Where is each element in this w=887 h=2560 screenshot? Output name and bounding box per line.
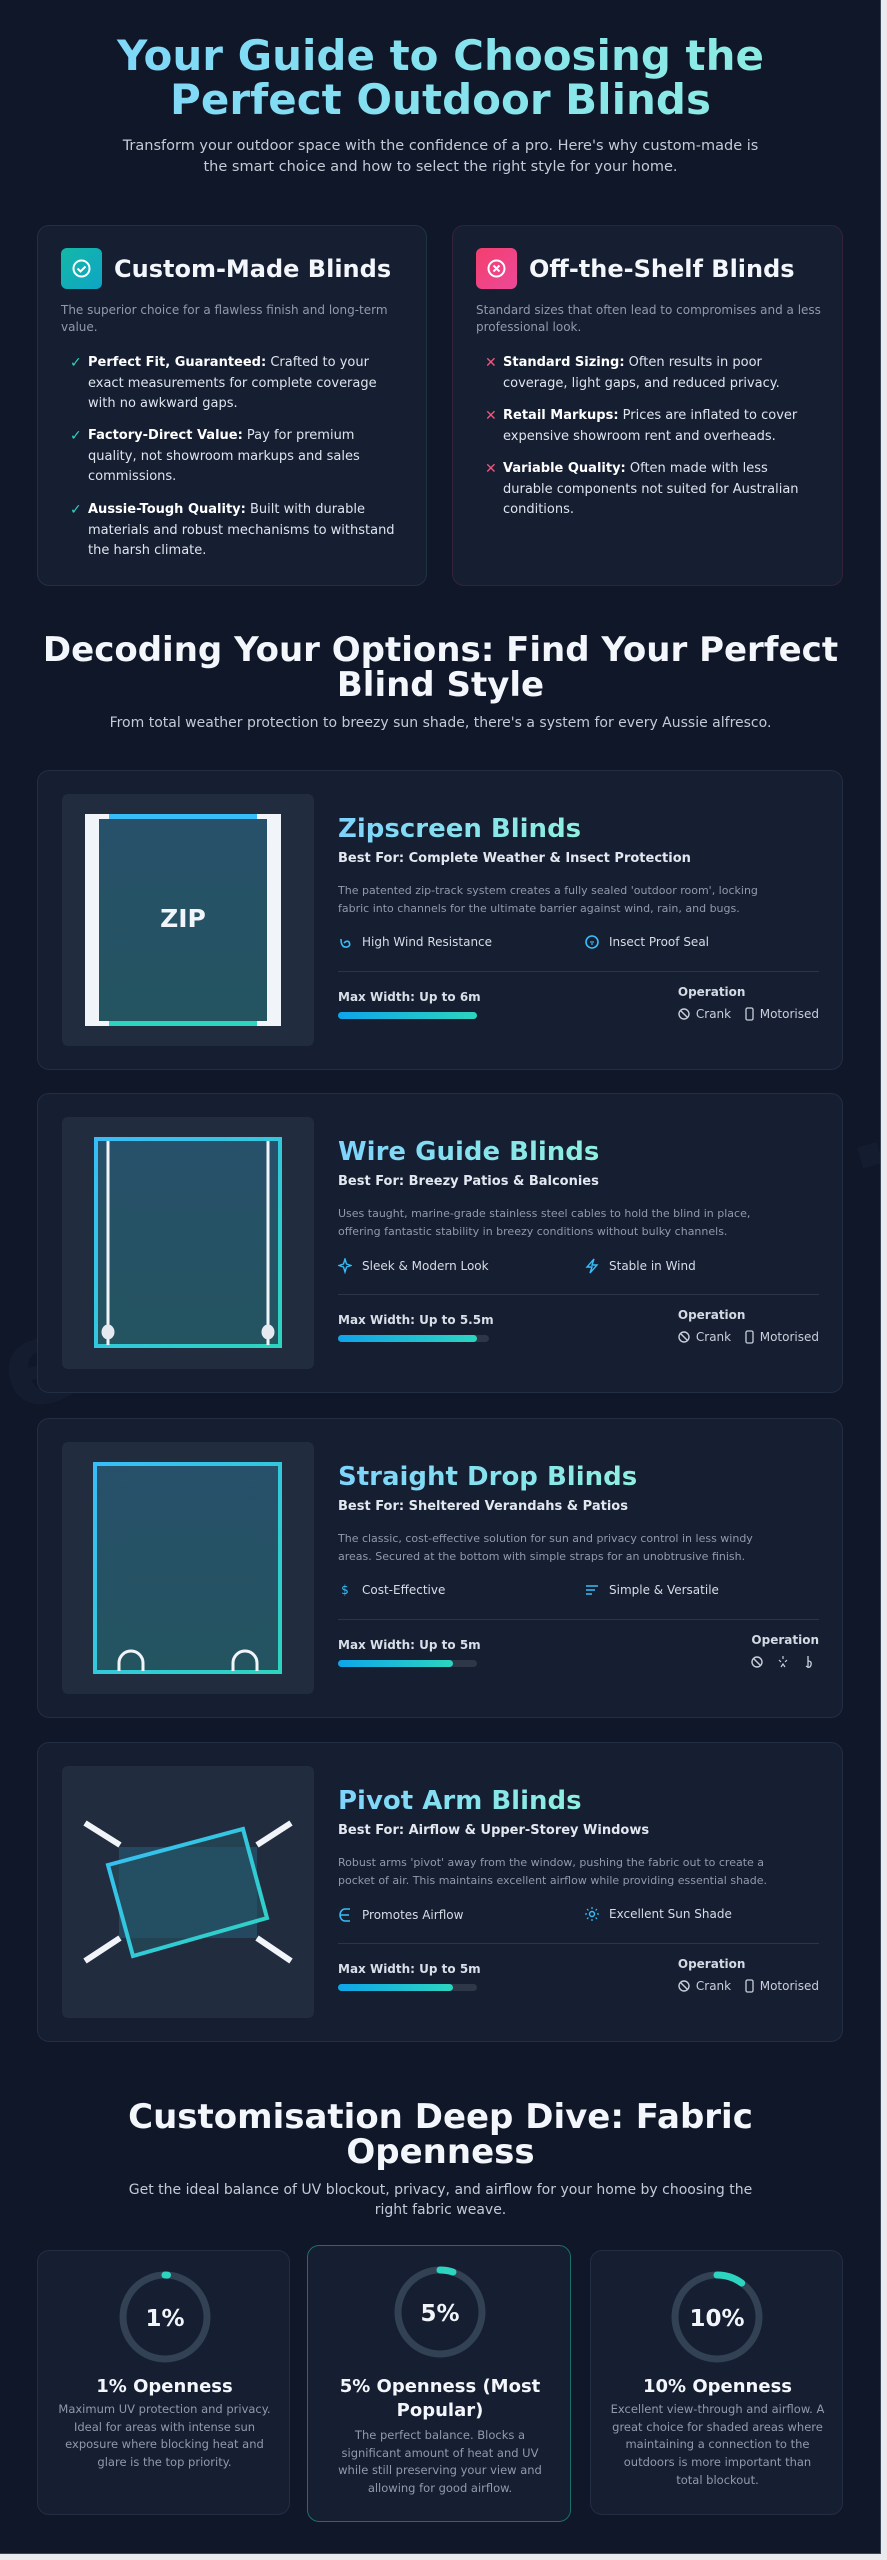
content: pivot arm: Crank Motorised <box>696 1979 819 1993</box>
content: pivot arm <box>338 1786 819 1993</box>
list: benefits: Factory-Direct Value: Pay for premium quality, not showroom markups and sales commissions. <box>88 428 360 484</box>
content: zipscreen: Crank Motorised <box>696 1007 819 1021</box>
list: benefits: ✓ <box>70 502 82 518</box>
content: pivot arm: Max Width: Up to 5m <box>338 1962 481 1976</box>
panel: 10% openness <box>590 2250 843 2515</box>
content: zipscreen: Insect Proof Seal <box>609 935 709 949</box>
content: wire guide: Stable in Wind <box>609 1259 696 1273</box>
text: 1%: Maximum UV protection and privacy. Ideal for areas with intense sun exposure where blocking heat and glare is the top priority. <box>58 2402 271 2469</box>
chart: 10% ring <box>672 2272 762 2362</box>
chart: 5% ring: 5% <box>420 2301 460 2327</box>
illustration: zip: ZIP <box>160 904 206 933</box>
content: straight drop: Best For: Sheltered Verandahs & Patios <box>338 1499 628 1514</box>
heading: Off-the-Shelf Blinds <box>529 255 795 283</box>
content: wire guide: Sleek & Modern Look <box>362 1259 489 1273</box>
description: The superior choice for a flawless finish and long-term value. <box>61 303 388 334</box>
content: zipscreen: Best For: Complete Weather & Insect Protection <box>338 851 691 866</box>
list: benefits: Perfect Fit, Guaranteed: Crafted to your exact measurements for complete coverage with no awkward gaps. <box>88 355 377 411</box>
heading: fabric openness: Customisation Deep Dive: Fabric Openness <box>128 2097 753 2172</box>
panel: off-the-shelf <box>452 225 843 586</box>
chart: 1% ring: 1% <box>145 2306 185 2332</box>
list: drawbacks: ✕ <box>485 461 497 477</box>
panel: straight drop <box>37 1418 843 1718</box>
panel: zipscreen <box>37 770 843 1070</box>
content: straight drop: Straight Drop Blinds <box>338 1462 637 1492</box>
panel: wire guide <box>37 1093 843 1393</box>
list: drawbacks: ✕ <box>485 355 497 371</box>
content: zipscreen <box>338 814 819 1021</box>
chart: 10% ring: 10% <box>689 2306 745 2332</box>
illustration: pivot arm <box>62 1766 314 2018</box>
list: benefits: ✓ <box>70 355 82 371</box>
title: Perfect Outdoor Blinds <box>170 75 711 124</box>
list: benefits <box>70 355 395 558</box>
content: straight drop: The classic, cost-effective solution for sun and privacy control in less windy areas. Secured at the bottom with simple straps for an unobtrusive finish. <box>338 1532 753 1563</box>
content: wire guide: Best For: Breezy Patios & Balconies <box>338 1174 599 1189</box>
content: zipscreen: Operation <box>678 985 745 999</box>
content: wire guide: Wire Guide Blinds <box>338 1137 599 1167</box>
content: wire guide: Crank Motorised <box>696 1330 819 1344</box>
icon: check badge <box>61 248 102 289</box>
text: 5%: The perfect balance. Blocks a significant amount of heat and UV while still preserving your view and allowing for good airflow. <box>338 2428 542 2495</box>
text: 10%: 10% Openness <box>643 2376 792 2397</box>
content: wire guide <box>338 1137 819 1344</box>
heading: decoding options: Decoding Your Options: Find Your Perfect Blind Style <box>43 630 838 705</box>
text: 5%: 5% Openness (Most Popular) <box>340 2376 540 2421</box>
content: zipscreen: Zipscreen Blinds <box>338 814 581 844</box>
content: pivot arm: Best For: Airflow & Upper-Storey Windows <box>338 1823 649 1838</box>
title <box>0 34 881 122</box>
heading: Custom-Made Blinds <box>114 255 391 283</box>
content: straight drop: $ <box>341 1583 349 1597</box>
panel: pivot arm <box>37 1742 843 2042</box>
text: 5% <box>338 2376 542 2495</box>
icon: x badge <box>476 248 517 289</box>
panel: 1% openness <box>37 2250 290 2515</box>
subheading: Get the ideal balance of UV blockout, privacy, and airflow for your home by choosing the right fabric weave. <box>129 2182 752 2218</box>
list: benefits: ✓ <box>70 428 82 444</box>
list: drawbacks: Variable Quality: Often made with less durable components not suited for Australian conditions. <box>503 461 799 517</box>
content: wire guide: Max Width: Up to 5.5m <box>338 1313 494 1327</box>
text: 10%: Excellent view-through and airflow. A great choice for shaded areas where maintaining a connection to the outdoors is more important than total blockout. <box>611 2402 824 2487</box>
content: straight drop: Max Width: Up to 5m <box>338 1638 481 1652</box>
content: pivot arm: Operation <box>678 1957 745 1971</box>
list: drawbacks: Retail Markups: Prices are inflated to cover expensive showroom rent and overheads. <box>503 408 797 444</box>
content: zipscreen: The patented zip-track system creates a fully sealed 'outdoor room', locking fabric into channels for the ultimate barrier against wind, rain, and bugs. <box>338 884 758 915</box>
description: Standard sizes that often lead to compromises and a less professional look. <box>476 303 821 334</box>
content: straight drop: Cost-Effective <box>362 1583 445 1597</box>
panel: 5% openness <box>307 2245 571 2522</box>
content: wire guide: Uses taught, marine-grade stainless steel cables to hold the blind in place, offering fantastic stability in breezy conditions without bulky channels. <box>338 1207 750 1238</box>
text: 1%: 1% Openness <box>96 2376 233 2397</box>
list: drawbacks: ✕ <box>485 408 497 424</box>
content: straight drop <box>338 1462 819 1668</box>
content: pivot arm: Pivot Arm Blinds <box>338 1786 582 1816</box>
chart: 5% ring <box>394 2266 486 2358</box>
subheading: From total weather protection to breezy sun shade, there's a system for every Aussie alfresco. <box>110 715 771 731</box>
content: pivot arm: Excellent Sun Shade <box>609 1907 732 1921</box>
content: straight drop: Operation <box>751 1633 819 1647</box>
illustration: zip <box>62 794 314 1046</box>
panel: custom-made <box>37 225 427 586</box>
content: zipscreen: Max Width: Up to 6m <box>338 990 481 1004</box>
title: Your Guide to Choosing the <box>117 31 764 80</box>
content: wire guide: Operation <box>678 1308 745 1322</box>
list: drawbacks: Standard Sizing: Often results in poor coverage, light gaps, and reduced privacy. <box>503 355 780 390</box>
chart: 1% ring <box>120 2272 210 2362</box>
list: drawbacks <box>485 355 799 517</box>
content: pivot arm: Robust arms 'pivot' away from the window, pushing the fabric out to create a pocket of air. This maintains excellent airflow while providing essential shade. <box>338 1856 767 1887</box>
content: pivot arm: Promotes Airflow <box>362 1908 463 1922</box>
illustration: straight drop <box>62 1442 314 1694</box>
illustration: wire guide <box>62 1117 314 1369</box>
subtitle: Transform your outdoor space with the confidence of a pro. Here's why custom-made is the smart choice and how to select the right style for your home. <box>123 138 758 174</box>
content: zipscreen: High Wind Resistance <box>362 935 492 949</box>
content: straight drop: Simple & Versatile <box>609 1583 719 1597</box>
list: benefits: Aussie-Tough Quality: Built with durable materials and robust mechanisms to withstand the harsh climate. <box>88 502 395 558</box>
